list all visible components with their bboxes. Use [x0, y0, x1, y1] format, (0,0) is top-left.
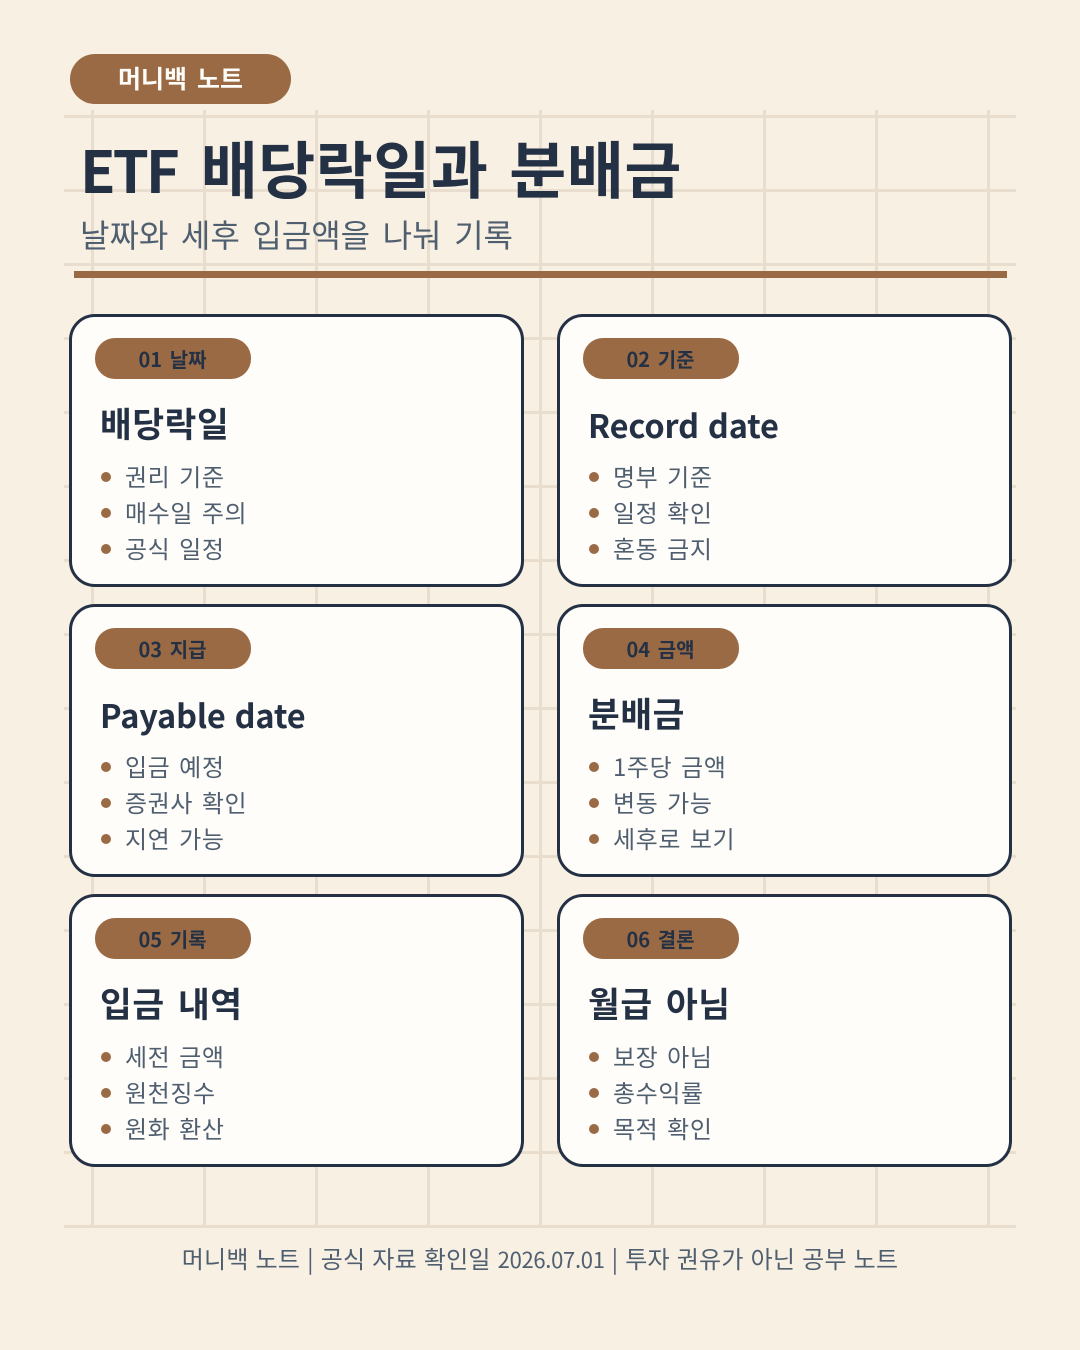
tag: 06 결론: 06 결론 — [626, 924, 694, 952]
card heading: 입금 내역: 입금 내역 — [100, 977, 243, 1027]
brand badge — [70, 54, 291, 104]
brand badge: 머니백 노트 — [118, 60, 243, 96]
list: 05: 원천징수 — [125, 1074, 216, 1108]
list: 05: 세전 금액 — [125, 1038, 225, 1072]
card heading: 분배금: 분배금 — [588, 687, 685, 737]
list: 03: 증권사 확인 — [125, 784, 247, 818]
tag: 02 기준: 02 기준 — [626, 344, 694, 372]
tag: 04 금액 — [582, 628, 738, 669]
subtitle: 날짜와 세후 입금액을 나눠 기록 — [80, 211, 513, 257]
title: ETF 배당락일과 분배금 — [80, 121, 682, 211]
tag: 01 날짜 — [94, 338, 250, 379]
list: 04: 세후로 보기 — [613, 820, 735, 854]
tag: 06 결론 — [582, 918, 738, 959]
list: 06: 보장 아님 — [613, 1038, 713, 1072]
card heading: 배당락일: 배당락일 — [100, 397, 229, 447]
list: 02: 명부 기준 — [613, 458, 713, 492]
list: 04: 1주당 금액 — [613, 748, 726, 782]
list: 05: 원화 환산 — [125, 1110, 225, 1144]
panel: 03 지급 — [69, 604, 524, 877]
list: 06: 목적 확인 — [613, 1110, 713, 1144]
list: 01: 매수일 주의 — [125, 494, 247, 528]
list: 02: 일정 확인 — [613, 494, 713, 528]
footer: 머니백 노트 | 공식 자료 확인일 2026.07.01 | 투자 권유가 아닌 공부 노트 — [182, 1240, 898, 1275]
list: 03: 지연 가능 — [125, 820, 225, 854]
list: 01 — [101, 458, 247, 564]
tag: 03 지급 — [94, 628, 250, 669]
card heading: Record date: Record date — [588, 401, 779, 448]
list: 04: 변동 가능 — [613, 784, 713, 818]
list: 06 — [589, 1038, 713, 1144]
list: 01: 공식 일정 — [125, 530, 225, 564]
tag: 02 기준 — [582, 338, 738, 379]
tag: 05 기록 — [94, 918, 250, 959]
tag: 05 기록: 05 기록 — [138, 924, 206, 952]
list: 02 — [589, 458, 713, 564]
card heading: 월급 아님: 월급 아님 — [588, 977, 731, 1027]
list: 05 — [101, 1038, 225, 1144]
list: 06: 총수익률 — [613, 1074, 704, 1108]
list: 03 — [101, 748, 247, 854]
tag: 01 날짜: 01 날짜 — [138, 344, 206, 372]
panel: 04 금액 — [557, 604, 1012, 877]
panel: 06 결론 — [557, 894, 1012, 1167]
card heading: Payable date: Payable date — [100, 691, 306, 738]
panel: 02 기준 — [557, 314, 1012, 587]
list: 02: 혼동 금지 — [613, 530, 713, 564]
list: 01: 권리 기준 — [125, 458, 225, 492]
panel: 05 기록 — [69, 894, 524, 1167]
tag: 04 금액: 04 금액 — [626, 634, 694, 662]
panel: 01 날짜 — [69, 314, 524, 587]
list: 04 — [589, 748, 735, 854]
header rule — [74, 271, 1007, 278]
tag: 03 지급: 03 지급 — [138, 634, 206, 662]
list: 03: 입금 예정 — [125, 748, 225, 782]
